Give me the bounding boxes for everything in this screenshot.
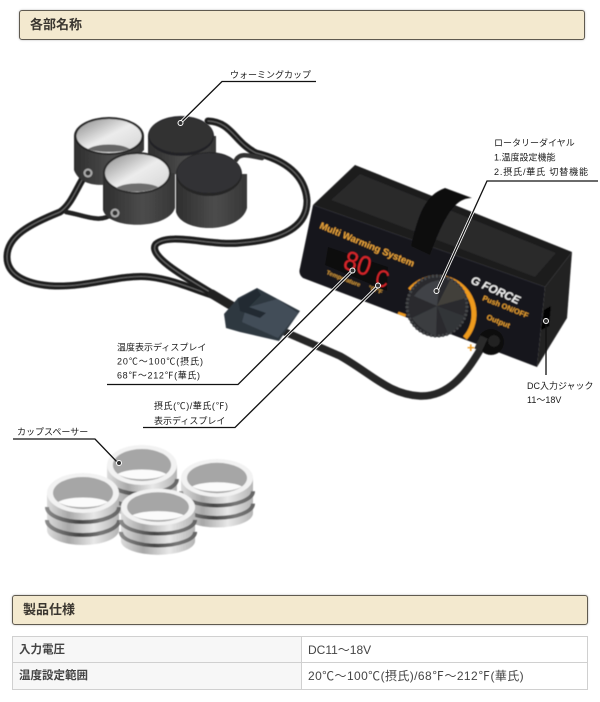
power label: Push ON/OFF	[481, 294, 530, 320]
row label: input voltage: 入力電圧	[19, 644, 65, 656]
spacer ring: back	[107, 445, 177, 517]
spacer ring: right	[181, 459, 253, 527]
callout: unit display	[143, 283, 380, 428]
row label: temperature range	[13, 663, 302, 689]
cable connector	[224, 288, 300, 341]
display caption: Temperature	[325, 270, 362, 289]
callout: warming cup	[178, 69, 316, 126]
spacer ring: left	[47, 473, 119, 545]
cup connectors	[84, 168, 120, 218]
callout: temperature display: 温度表示ディスプレイ	[117, 342, 206, 352]
callout: DC jack: 11～18V	[527, 395, 561, 405]
callout: cup spacer	[13, 427, 122, 466]
heading: parts names	[19, 10, 585, 40]
callout: rotary dial: 1.温度設定機能	[494, 152, 556, 162]
row value: input voltage: DC11～18V	[308, 643, 371, 657]
callout: DC jack: DC入力ジャック	[527, 380, 594, 391]
cup spacers	[47, 445, 253, 555]
brand logo: G FORCE	[469, 275, 522, 307]
minus sign	[398, 312, 406, 317]
spacer ring: front	[121, 489, 195, 555]
callout: temperature display: 20℃～100℃(摂氏)	[117, 356, 203, 366]
DC jack	[541, 306, 551, 330]
display window	[325, 247, 388, 291]
plus sign: +	[467, 340, 475, 355]
rotary dial	[406, 275, 468, 337]
output jack	[478, 329, 504, 355]
heading: product specifications	[12, 595, 588, 625]
cup: front right, closed	[176, 152, 247, 228]
orange arc	[410, 278, 474, 338]
temperature readout: 80	[340, 245, 375, 282]
output label: Output	[485, 313, 512, 330]
row label: input voltage	[13, 637, 302, 663]
product name: Multi Warming System	[318, 221, 416, 270]
cup: back right, closed	[148, 116, 216, 174]
unit caption: °C/°F	[367, 285, 383, 296]
heading: product specifications: 製品仕様	[23, 602, 75, 617]
callout: rotary dial	[434, 137, 598, 294]
box top	[313, 165, 572, 287]
control box	[299, 165, 572, 367]
callout: unit display: 表示ディスプレイ	[154, 415, 225, 426]
box right side	[537, 252, 572, 367]
cup: back left, open	[74, 117, 144, 185]
unit readout: C	[373, 265, 392, 294]
row value: temperature range: 20℃～100℃(摂氏)/68℉～212℉(華氏)	[308, 669, 524, 683]
callout: temperature display	[107, 268, 355, 384]
row label: temperature range: 温度設定範囲	[19, 670, 88, 682]
cable assembly	[7, 121, 480, 396]
row value: input voltage	[302, 637, 587, 663]
cup: front left, open	[103, 152, 175, 225]
strap	[411, 188, 472, 255]
callout: cup spacer: カップスペーサー	[17, 427, 88, 437]
callout: rotary dial: ロータリーダイヤル	[494, 137, 575, 148]
box front	[299, 205, 545, 367]
callout: DC jack	[527, 318, 594, 405]
callout: temperature display: 68℉～212℉(華氏)	[117, 370, 200, 380]
callout: unit display: 摂氏(℃)/華氏(℉)	[154, 400, 228, 411]
callout: rotary dial: 2.摂氏/華氏 切替機能	[494, 166, 588, 177]
callout: warming cup: ウォーミングカップ	[230, 69, 311, 80]
warming cups	[74, 116, 247, 228]
specifications table	[12, 636, 588, 690]
heading: parts names: 各部名称	[30, 17, 82, 32]
